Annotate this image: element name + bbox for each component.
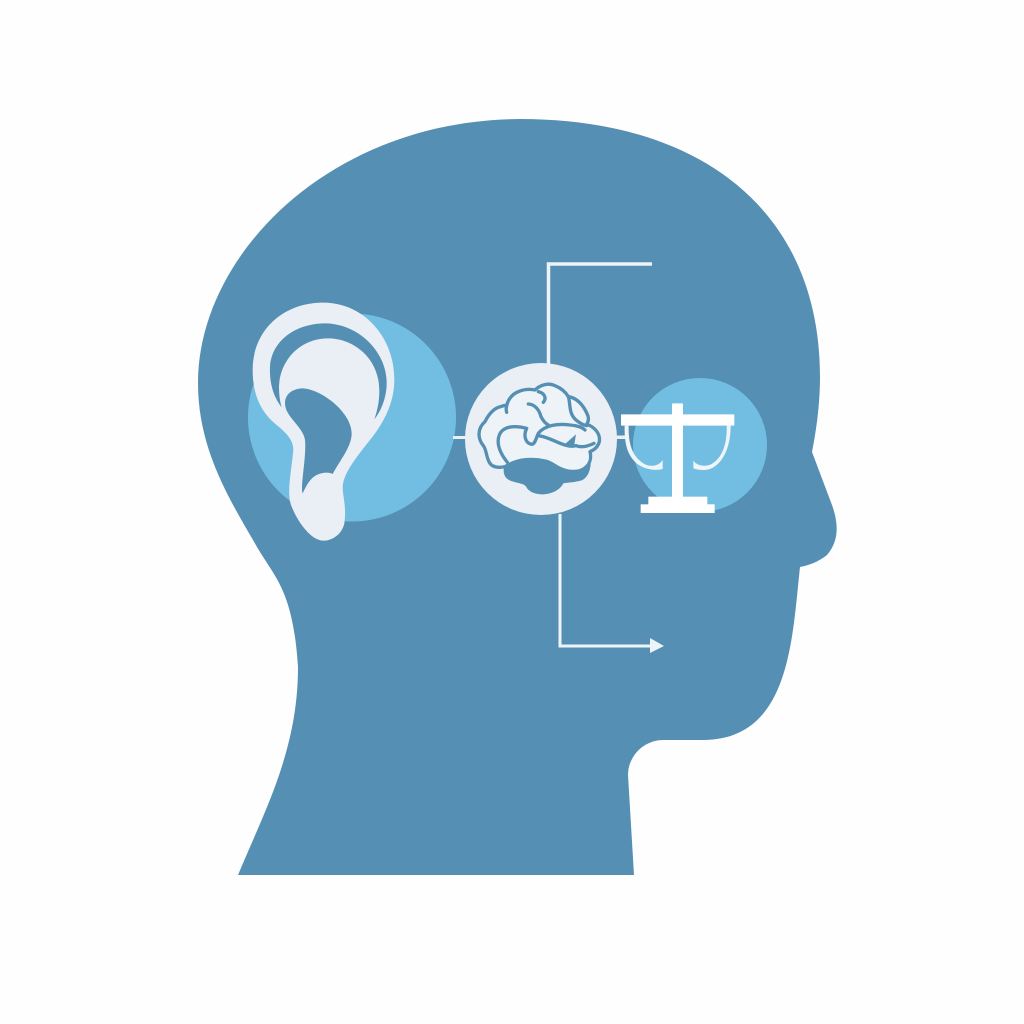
connector: brain to scales — [616, 436, 626, 439]
wedge of shadow between right lobes — [565, 434, 576, 446]
ear badge circle — [248, 314, 456, 522]
icon: balance scales — [621, 403, 734, 513]
head silhouette in profile — [198, 119, 837, 875]
icon: brain in circle — [465, 363, 617, 515]
icon: ear — [253, 303, 394, 541]
scales badge circle — [633, 378, 767, 512]
arrow: lower line from brain with arrowhead — [560, 514, 664, 653]
connector: ear to brain — [453, 436, 466, 439]
arrow: upper bracket line from brain — [548, 264, 652, 364]
